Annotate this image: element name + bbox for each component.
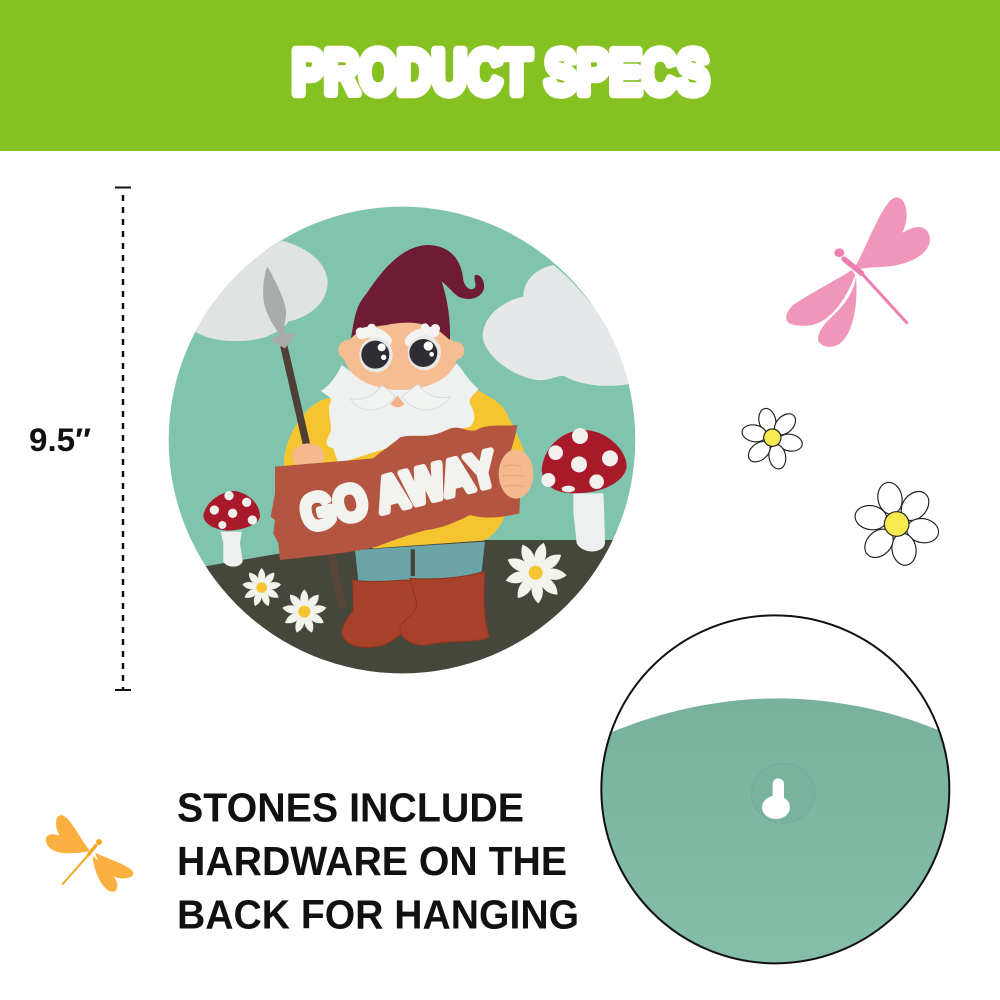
eyebrows [356, 323, 440, 341]
pants [355, 542, 485, 582]
inset: keyhole on back of stone [590, 615, 960, 977]
pink dragonfly [786, 197, 930, 347]
stone back [602, 698, 948, 962]
spear [263, 267, 307, 445]
gnome body [284, 390, 524, 548]
left mushroom [203, 491, 260, 567]
sign text: GO AWAY [295, 441, 502, 542]
small flower [741, 407, 804, 470]
left hand [292, 443, 324, 470]
dimension label: 9.5″ [29, 422, 91, 458]
moustache and nose [350, 384, 450, 410]
face [344, 320, 457, 390]
right hand [499, 449, 533, 499]
header banner [0, 0, 1000, 151]
boots [342, 572, 489, 647]
large flower [853, 480, 941, 567]
beard [321, 363, 478, 463]
right mushroom [541, 428, 627, 551]
eyes [359, 335, 441, 372]
ground daisies [242, 535, 574, 634]
inset outline [601, 615, 949, 963]
hat [351, 245, 484, 340]
gnome stepping stone [160, 207, 640, 680]
ears [338, 340, 464, 360]
dimension line [115, 188, 131, 690]
title: PRODUCT SPECS [292, 38, 709, 108]
lower spear shaft [332, 557, 342, 604]
clouds and ground [196, 240, 628, 674]
keyhole [762, 778, 790, 819]
wooden sign [271, 425, 520, 560]
orange dragonfly [46, 815, 133, 892]
hanging hardware caption [177, 784, 579, 938]
keyhole dimple [752, 763, 815, 823]
hanging hardware caption: BACK FOR HANGING [177, 892, 579, 938]
stone background [169, 207, 635, 673]
hanging hardware caption: STONES INCLUDE [177, 784, 524, 830]
hanging hardware caption: HARDWARE ON THE [177, 838, 567, 884]
